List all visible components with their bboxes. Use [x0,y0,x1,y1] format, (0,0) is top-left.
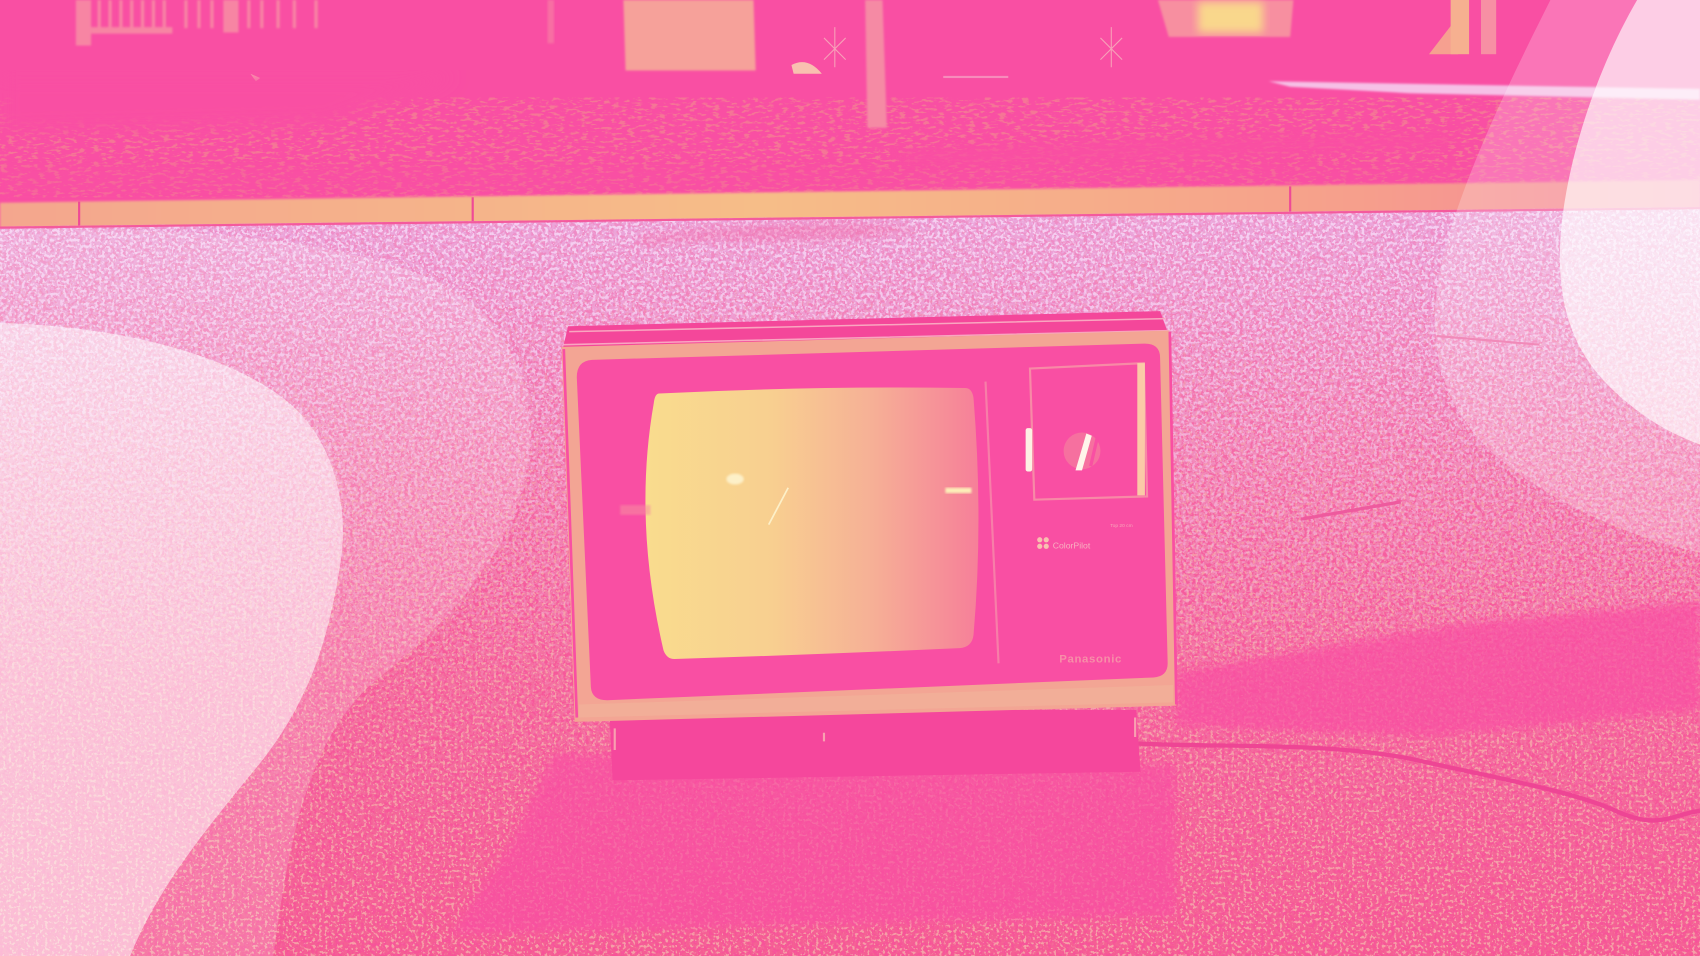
dark front bezel [577,344,1168,700]
background: dark pink houses and hedges [0,0,1700,206]
curb [0,180,1700,229]
ColorPilot logo [1037,537,1091,550]
curb shadow line [0,208,1700,228]
Panasonic logo: Panasonic [1059,653,1122,665]
decorative blob: left inner [0,323,343,956]
television screen [645,388,978,659]
background houses, fence, window and lights [76,0,1496,81]
power cord [1138,744,1700,820]
shadow below the television [450,753,1176,934]
cabinet edge highlights [564,332,1176,718]
tuning knob [1064,432,1100,470]
tree trunk [865,0,887,128]
grass lawn band [0,76,1700,199]
screen surround line [986,382,999,663]
panel left highlight [1026,428,1032,471]
tree shadow on the road [640,222,922,245]
television cabinet [562,331,1176,722]
cabinet lower trim [579,685,1173,718]
decorative blob: right outer [1435,0,1700,553]
television stand [609,710,1141,780]
decorative blob: left outer [0,229,530,956]
control panel [1026,363,1147,500]
screen reflections [726,474,971,525]
television lid highlights [564,319,1169,345]
road marks [1301,336,1540,519]
television lid [562,311,1170,353]
screen glare left [620,505,651,515]
road surface with gravel texture [0,206,1700,956]
ColorPilot logo: ColorPilot [1053,540,1091,550]
shadow beside the television [1176,602,1700,737]
small model label: Top 20 cm [1110,523,1133,529]
panel right highlight [1137,363,1145,495]
decorative blob: right inner [1560,0,1700,444]
stand details [615,718,1135,750]
television [562,311,1176,780]
distant road strip [1268,81,1700,100]
panel frame [1030,363,1147,500]
